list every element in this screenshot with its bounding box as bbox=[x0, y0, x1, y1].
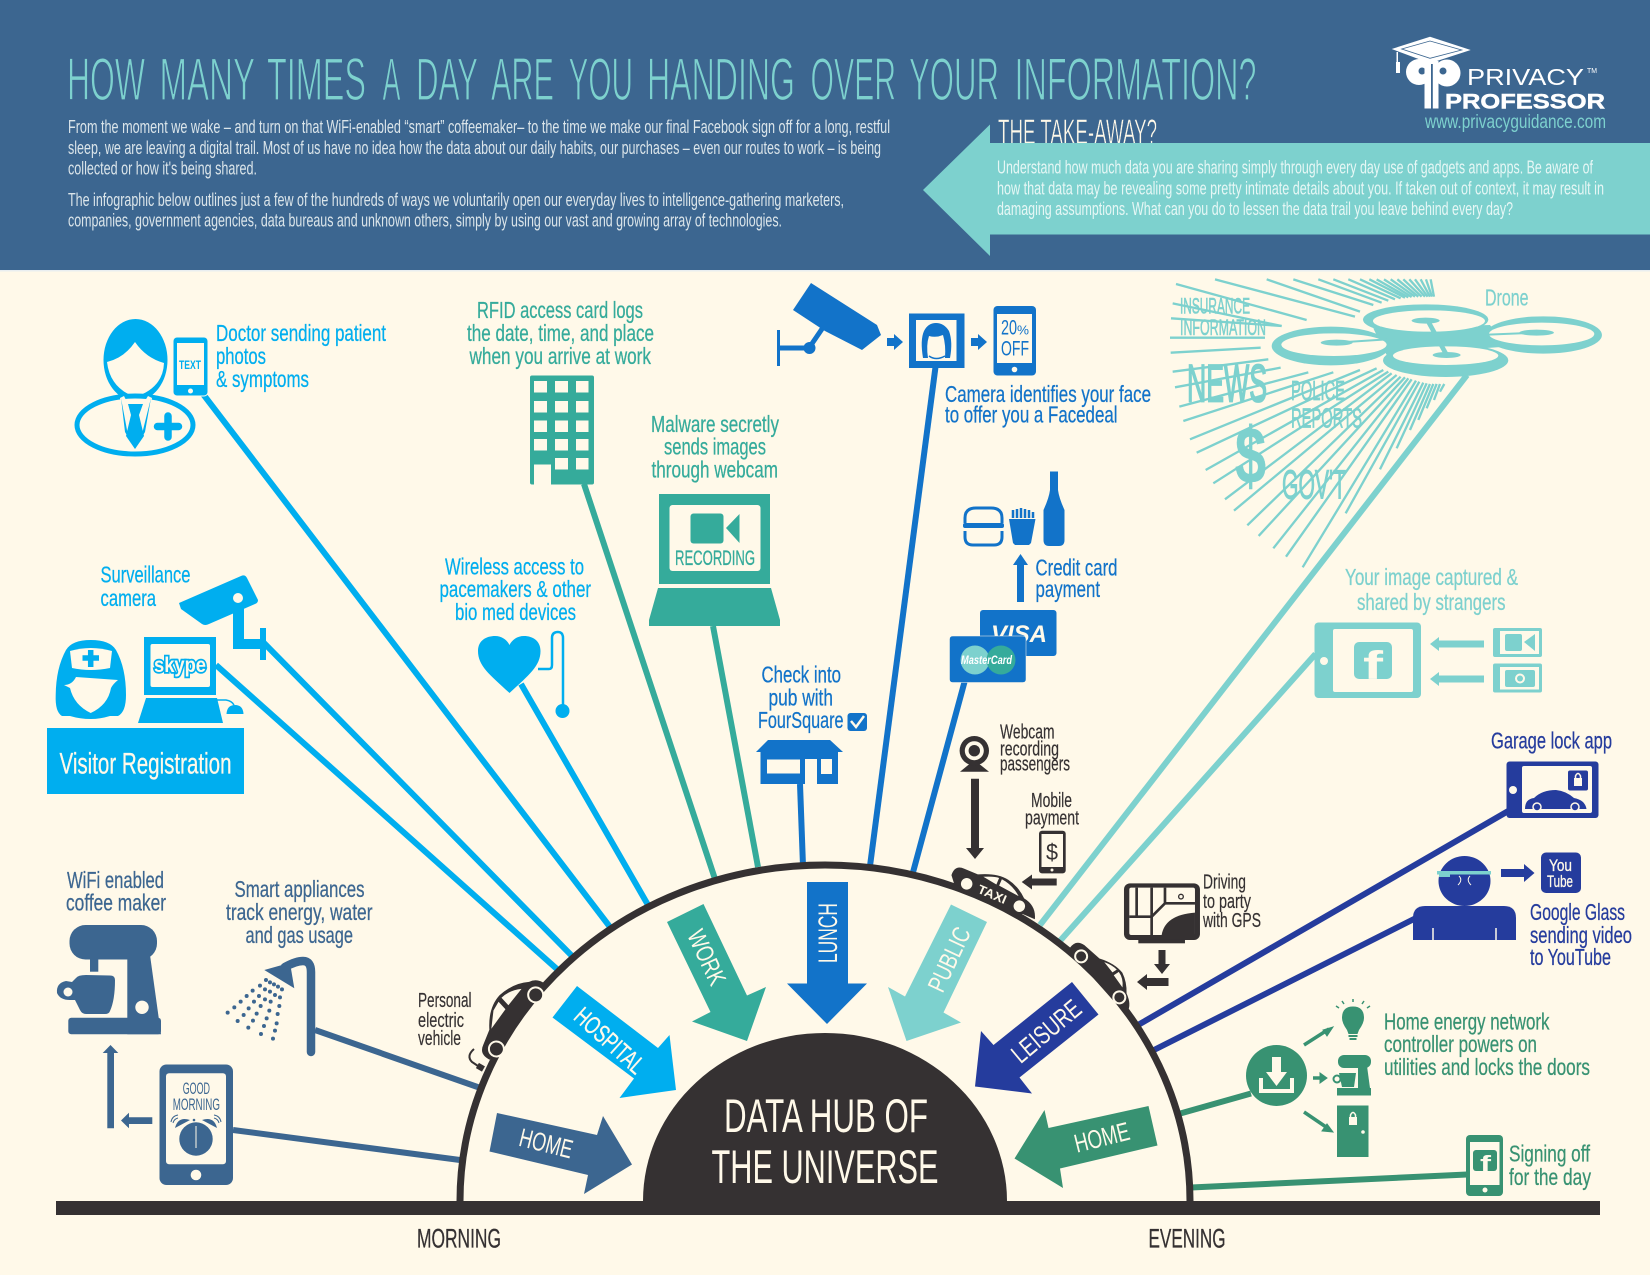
icon: alarm phone bbox=[160, 1064, 233, 1185]
label: image captured: Your image captured & bbox=[1345, 564, 1518, 590]
label: foursquare: pub with bbox=[768, 684, 833, 710]
connector lines: public bbox=[1040, 375, 1467, 942]
arrow: public: PUBLIC bbox=[923, 923, 977, 996]
icon: video camera device bbox=[1493, 628, 1542, 657]
intro text block: companies, government agencies, data bureaus and unknown others, simply by using our vast and growing array of technologies. bbox=[68, 210, 782, 230]
connector lines: evening home bbox=[1178, 1094, 1467, 1188]
icon: skype computer bbox=[138, 637, 244, 723]
label: doctor: photos bbox=[216, 343, 266, 369]
arrow: lunch bbox=[787, 882, 867, 1024]
title: OVER bbox=[810, 46, 896, 113]
arrow: webcam to taxi bbox=[966, 779, 984, 859]
label: Google Glass bbox=[1530, 899, 1632, 970]
intro text block: sleep, we are leaving a digital trail. Most of us have no idea how the data about our daily habits, our purchases – even our routes to work – is being bbox=[68, 137, 881, 158]
take-away heading: THE TAKE-AWAY? bbox=[998, 113, 1157, 152]
arrow: lunch: LUNCH bbox=[813, 903, 843, 963]
icon: YouTube bbox=[1541, 852, 1581, 893]
arrow: face to offer bbox=[971, 334, 987, 350]
icon: mastercard bbox=[950, 636, 1026, 682]
words in data rays: GOV'T bbox=[1282, 461, 1346, 507]
label: RFID: the date, time, and place bbox=[467, 320, 654, 346]
label: surveillance: camera bbox=[100, 585, 156, 611]
title: ARE bbox=[491, 46, 554, 113]
icon: doctor with phone: TEXT bbox=[179, 358, 201, 372]
label: credit card bbox=[1036, 554, 1118, 602]
data hub: DATA HUB OF bbox=[724, 1089, 928, 1142]
label: webcam: Webcam bbox=[1000, 722, 1054, 744]
label: RFID: when you arrive at work bbox=[469, 343, 651, 369]
take-away arrow bbox=[923, 124, 1650, 256]
panel: visitor registration: Visitor Registration bbox=[60, 748, 232, 780]
icon: home energy controller bbox=[1246, 1045, 1307, 1106]
arrow: payment to taxi bbox=[1022, 874, 1057, 890]
logo: Privacy Professor: TM bbox=[1587, 68, 1597, 75]
label: malware bbox=[651, 411, 779, 482]
arrow: leisure bbox=[975, 982, 1098, 1094]
label: surveillance bbox=[100, 562, 190, 611]
label: coffee maker: WiFi enabled bbox=[67, 867, 164, 893]
icon: alarm phone: MORNING bbox=[173, 1095, 220, 1114]
label: malware: sends images bbox=[664, 434, 766, 460]
icon: laptop recording bbox=[649, 494, 780, 626]
label: facedeal: to offer you a Facedeal bbox=[945, 402, 1118, 428]
icon: drone bbox=[1272, 304, 1602, 377]
icon: YouTube: You bbox=[1549, 856, 1572, 875]
label: doctor: Doctor sending patient bbox=[216, 320, 386, 346]
icon: electric car bbox=[465, 966, 550, 1072]
arrow: camera to face bbox=[887, 334, 903, 350]
data hub bbox=[643, 1033, 1007, 1201]
words in data rays: INFORMATION bbox=[1180, 315, 1266, 340]
icon: coupon phone: OFF bbox=[1001, 338, 1029, 360]
arrows: controller to devices bbox=[1304, 1027, 1333, 1132]
label: foursquare: Check into bbox=[762, 662, 841, 688]
title: YOU bbox=[568, 46, 633, 113]
baseline bar bbox=[56, 1201, 1600, 1215]
arrow: card to food bbox=[1013, 554, 1028, 602]
logo: Privacy Professor: www.privacyguidance.com bbox=[1424, 111, 1606, 133]
label: GPS: to party bbox=[1203, 891, 1251, 913]
title: HANDING bbox=[647, 46, 795, 113]
arrows: GPS to car bbox=[1137, 950, 1170, 990]
icon: locked door bbox=[1337, 1106, 1368, 1157]
icon: facebook phone: f bbox=[1480, 1151, 1492, 1176]
label: smart appliances: Smart appliances bbox=[234, 876, 364, 902]
dome arc bbox=[460, 865, 1190, 1201]
label: evening: EVENING bbox=[1148, 1224, 1226, 1254]
icon: doctor with phone bbox=[77, 319, 208, 454]
icon: garage tablet bbox=[1506, 762, 1598, 818]
label: home energy: controller powers on bbox=[1384, 1031, 1537, 1057]
icon: facebook tablet bbox=[1314, 622, 1421, 698]
icon: coupon phone bbox=[994, 306, 1036, 376]
label: GPS: Driving bbox=[1203, 871, 1246, 893]
icon: coffee maker small bbox=[1334, 1055, 1371, 1096]
label: electric vehicle: Personal bbox=[418, 990, 472, 1012]
icon: photo camera device bbox=[1493, 664, 1542, 692]
label: GPS bbox=[1202, 871, 1261, 932]
label: signing off bbox=[1509, 1140, 1591, 1190]
arrow: leisure: LEISURE bbox=[1005, 993, 1087, 1069]
label: doctor bbox=[216, 320, 386, 392]
label: smart appliances bbox=[226, 876, 373, 948]
intro text block bbox=[68, 116, 890, 230]
arrow: glass to YouTube bbox=[1501, 864, 1534, 882]
logo: Privacy Professor bbox=[1392, 37, 1606, 133]
label: electric vehicle bbox=[418, 990, 472, 1050]
arrow: home morning: HOME bbox=[516, 1122, 576, 1164]
arrow: public bbox=[888, 904, 987, 1041]
icon: bottle bbox=[1044, 472, 1064, 546]
label: credit card: payment bbox=[1036, 576, 1100, 602]
intro text block: collected or how it's being shared. bbox=[68, 158, 257, 178]
label: facedeal: Camera identifies your face bbox=[945, 381, 1151, 407]
icon: skype computer: skype bbox=[154, 654, 206, 677]
icon: fries bbox=[1009, 508, 1036, 545]
icon: mobile payment phone bbox=[1039, 831, 1066, 873]
data hub: THE UNIVERSE bbox=[712, 1140, 938, 1193]
intro text block: The infographic below outlines just a few of the hundreds of ways we voluntarily open our everyday lives to intelligence-gathering marketers, bbox=[68, 189, 844, 210]
label: pacemakers: Wireless access to bbox=[445, 554, 584, 580]
icon: face frame bbox=[909, 314, 964, 368]
icon: shower bbox=[226, 961, 311, 1052]
label: webcam bbox=[1000, 722, 1070, 776]
label: facedeal bbox=[945, 381, 1151, 428]
arrow: home evening bbox=[1014, 1106, 1158, 1188]
label: pacemakers: pacemakers & other bbox=[440, 576, 591, 602]
label: RFID bbox=[467, 297, 654, 369]
title bbox=[67, 46, 1256, 113]
title: MANY bbox=[160, 46, 255, 113]
icon: burger bbox=[963, 508, 1004, 545]
label: drone: Drone bbox=[1485, 285, 1528, 311]
icon: checkbox bbox=[848, 713, 867, 731]
icon: facebook phone bbox=[1466, 1135, 1503, 1196]
label: signing off: Signing off bbox=[1509, 1140, 1590, 1166]
icon: mobile payment phone: $ bbox=[1046, 839, 1058, 865]
panel: visitor registration bbox=[47, 728, 244, 794]
label: webcam: passengers bbox=[1000, 754, 1070, 776]
icon: visa card: VISA bbox=[991, 621, 1047, 648]
words in data rays: $ bbox=[1235, 411, 1266, 500]
label: smart appliances: track energy, water bbox=[226, 899, 373, 925]
title: HOW bbox=[67, 46, 145, 113]
arrow: phone to coffee maker bbox=[103, 1045, 152, 1128]
label: home energy bbox=[1384, 1008, 1590, 1080]
label: image captured: shared by strangers bbox=[1357, 589, 1506, 615]
label: doctor: & symptoms bbox=[216, 366, 309, 392]
icon: taxi bbox=[948, 858, 1045, 920]
label: GPS: with GPS bbox=[1202, 910, 1261, 932]
label: malware: through webcam bbox=[652, 456, 778, 482]
label: webcam: recording bbox=[1000, 738, 1059, 760]
title: YOUR bbox=[909, 46, 999, 113]
arrow: home evening: HOME bbox=[1071, 1116, 1133, 1159]
icon: heart with pacemaker bbox=[478, 632, 570, 718]
label: mobile payment bbox=[1025, 790, 1079, 830]
label: electric vehicle: vehicle bbox=[418, 1028, 461, 1050]
label: credit card: Credit card bbox=[1036, 554, 1118, 580]
words in data rays bbox=[1180, 294, 1362, 507]
icon: mastercard: MasterCard bbox=[961, 655, 1013, 667]
take-away text bbox=[997, 156, 1604, 219]
words in data rays: REPORTS bbox=[1291, 403, 1362, 434]
arrow: work bbox=[667, 904, 766, 1041]
icon: GPS bbox=[1124, 883, 1200, 943]
title: TIMES bbox=[267, 46, 366, 113]
icon: taxi: TAXI bbox=[976, 882, 1009, 907]
icon: office building bbox=[530, 376, 594, 484]
connector lines: leisure bbox=[1138, 810, 1510, 1051]
label: foursquare: FourSquare bbox=[758, 707, 844, 733]
label: Google Glass: to YouTube bbox=[1530, 944, 1611, 970]
title: A bbox=[382, 46, 400, 113]
label: foursquare bbox=[758, 662, 844, 733]
label: electric vehicle: electric bbox=[418, 1010, 464, 1032]
connector lines: morning home bbox=[233, 1030, 479, 1160]
icon: laptop recording: RECORDING bbox=[675, 547, 755, 570]
panel: header band bbox=[0, 0, 1650, 272]
label: pacemakers bbox=[440, 554, 591, 625]
icon: pub bbox=[756, 740, 843, 784]
label: home energy: Home energy network bbox=[1384, 1008, 1550, 1034]
icon: webcam bbox=[960, 736, 989, 772]
title: DAY bbox=[416, 46, 478, 113]
icon: facebook tablet: f bbox=[1363, 644, 1384, 688]
label: surveillance: Surveillance bbox=[100, 562, 190, 588]
arrows: cameras to tablet bbox=[1430, 637, 1484, 686]
title: INFORMATION? bbox=[1014, 46, 1256, 113]
icon: alarm phone: GOOD bbox=[183, 1079, 210, 1098]
icon: visa card bbox=[980, 610, 1056, 656]
icon: Google Glass person bbox=[1413, 856, 1516, 940]
label: mobile payment: Mobile bbox=[1031, 790, 1072, 812]
icon: nurse bbox=[56, 640, 126, 719]
icon: surveillance camera bbox=[179, 575, 266, 660]
label: signing off: for the day bbox=[1509, 1164, 1591, 1190]
logo: Privacy Professor: PROFESSOR bbox=[1445, 89, 1606, 113]
arrow: hospital: HOSPITAL bbox=[568, 1002, 650, 1080]
label: mobile payment: payment bbox=[1025, 808, 1079, 830]
label: malware: Malware secretly bbox=[651, 411, 779, 437]
words in data rays: NEWS bbox=[1187, 355, 1267, 414]
words in data rays: POLICE bbox=[1291, 375, 1345, 406]
connector lines: hospital bbox=[203, 394, 648, 970]
icon: light bulb bbox=[1336, 999, 1370, 1040]
label: coffee maker: coffee maker bbox=[66, 890, 166, 916]
arrow: home morning bbox=[490, 1113, 632, 1194]
label: coffee maker bbox=[66, 867, 166, 916]
label: morning: MORNING bbox=[417, 1224, 501, 1254]
icon: YouTube: Tube bbox=[1547, 872, 1573, 891]
label: RFID: RFID access card logs bbox=[477, 297, 643, 323]
icon: coupon phone: % bbox=[1017, 322, 1029, 338]
graphic: data rays bbox=[1170, 279, 1444, 567]
icon: coupon phone: 20 bbox=[1001, 316, 1017, 340]
label: pacemakers: bio med devices bbox=[455, 599, 576, 625]
icon: street camera bbox=[777, 283, 881, 366]
icon: leisure car bbox=[1066, 933, 1144, 1014]
label: smart appliances: and gas usage bbox=[246, 922, 353, 948]
connector lines: work bbox=[584, 484, 758, 879]
connector lines: lunch bbox=[800, 367, 964, 876]
arrow: work: WORK bbox=[681, 925, 731, 990]
intro text block: From the moment we wake – and turn on that WiFi-enabled “smart” coffeemaker– to the time we make our final Facebook sign off for a long, restful bbox=[68, 116, 890, 137]
label: image captured bbox=[1345, 564, 1518, 615]
logo: Privacy Professor: PRIVACY bbox=[1467, 64, 1584, 90]
icon: coffee maker bbox=[57, 925, 161, 1034]
words in data rays: INSURANCE bbox=[1180, 294, 1250, 318]
